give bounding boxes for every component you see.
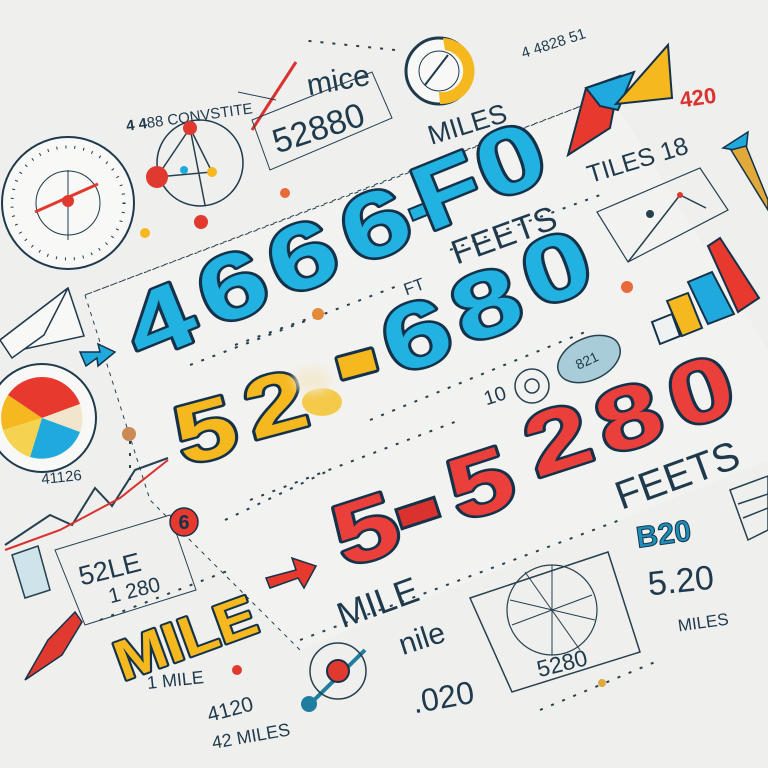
central sheet panel xyxy=(85,95,768,650)
second row of numbers: 680: 6 xyxy=(367,275,465,395)
first row of numbers: 4666-F0: 0 xyxy=(460,100,560,221)
red circle 6 xyxy=(170,508,198,536)
label: FT FEETS: FEETS xyxy=(446,199,562,272)
first row of numbers: 4666-F0: 6 xyxy=(182,226,282,347)
circle icons mid right: 10 xyxy=(481,382,509,410)
label: mice with arrow: mice xyxy=(304,59,372,102)
first row of numbers: 4666-F0: F xyxy=(398,131,497,251)
circular diagram box 5280 xyxy=(470,552,640,692)
pencil arrow xyxy=(723,132,768,210)
box: 52880 xyxy=(252,72,392,170)
pie chart xyxy=(0,364,96,472)
shape: coloured folded chart xyxy=(568,45,672,155)
label: 420 red: 420 xyxy=(678,83,718,113)
yellow MILE: MILE xyxy=(106,584,265,693)
label: 4120 / 42 MILES: 42 MILES xyxy=(210,719,292,753)
label: 1 MILE: 1 MILE xyxy=(146,667,205,693)
label: mice with arrow xyxy=(238,59,372,130)
label: FT FEETS: FT xyxy=(401,274,427,299)
dial icon bottom centre xyxy=(301,643,366,712)
second row of numbers: 680 xyxy=(367,208,605,395)
line chart red xyxy=(5,458,168,550)
label: MILE: MILE xyxy=(331,569,424,636)
label: 4120 / 42 MILES: 4120 xyxy=(205,693,256,727)
network diagram xyxy=(146,120,243,206)
gauge top centre xyxy=(406,38,475,104)
box: 52LE 280: 1 280 xyxy=(106,573,163,608)
label: 4120 / 42 MILES xyxy=(205,693,292,753)
box: 52880: 52880 xyxy=(268,96,369,161)
red numbers: 5-5280: 8 xyxy=(583,361,674,474)
scattered small marks xyxy=(100,40,660,710)
arrow: red xyxy=(266,558,316,588)
second row of numbers: 680: 0 xyxy=(507,208,605,328)
label: FT FEETS xyxy=(401,199,562,299)
yellow numbers: 52 5 -: 5 xyxy=(164,377,247,483)
paper plane xyxy=(0,288,84,358)
bar chart 3D xyxy=(652,238,759,344)
label: 41126: 41126 xyxy=(40,467,83,488)
small arrow blue xyxy=(80,344,115,366)
label: MILES: MILES xyxy=(424,98,510,151)
circular diagram box 5280: 5280 xyxy=(534,644,590,682)
label: B20 blue: B20 xyxy=(634,514,693,555)
red numbers: 5-5280: 0 xyxy=(655,335,746,448)
label: MILES small: MILES xyxy=(677,610,730,636)
red circle 6: 6 xyxy=(178,512,190,534)
chart box with line graph xyxy=(597,168,728,262)
red numbers: 5-5280: 5 xyxy=(435,427,526,540)
label: 020: .020 xyxy=(409,674,477,720)
label: conversion text top: 4 488 CONVSTITE xyxy=(125,100,254,135)
label: nile: nile xyxy=(395,616,449,662)
first row of numbers: 4666-F0: 6 xyxy=(252,196,352,317)
label: 5.20: 5.20 xyxy=(646,559,716,603)
label: FEETS lower right: FEETS xyxy=(609,433,746,519)
second row of numbers: 680: 8 xyxy=(437,244,535,364)
label: TILES: TILES 18 xyxy=(584,132,692,189)
first row of numbers: 4666-F0: 4 xyxy=(110,260,210,381)
red pointer xyxy=(25,612,82,680)
circle icons mid right xyxy=(481,326,628,410)
box: 52LE 280: 52LE xyxy=(76,547,144,591)
table icon right xyxy=(730,476,768,540)
gauge top left xyxy=(2,137,134,269)
yellow numbers: 52 5 - xyxy=(164,347,378,483)
red numbers: 5-5280 xyxy=(320,335,746,586)
yellow numbers: 52 5 -: 2 xyxy=(234,351,317,457)
circle icons mid right: 821 xyxy=(573,348,601,373)
red numbers: 5-5280: 5 xyxy=(320,473,411,586)
first row of numbers: 4666-F0: 6 xyxy=(325,164,425,285)
red numbers: 5-5280: 2 xyxy=(512,383,603,496)
ladder bars icon xyxy=(12,546,50,598)
small coloured dots xyxy=(122,188,633,687)
first row of numbers: 4666-F0 xyxy=(110,100,560,381)
label: top right small numbers: 4 4828 51 xyxy=(519,25,588,62)
box: 52LE 280 xyxy=(55,515,196,625)
